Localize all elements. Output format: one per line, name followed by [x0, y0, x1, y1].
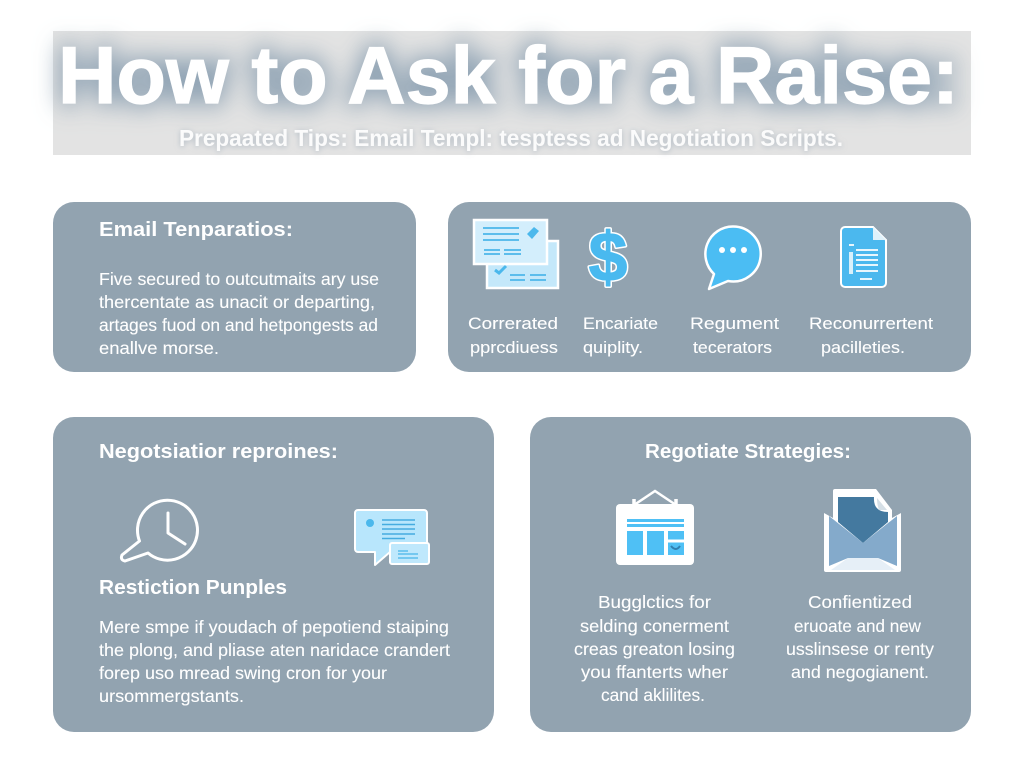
label: column 3: Regument — [690, 314, 779, 333]
label: column 3: tecerators — [693, 338, 772, 357]
icon: envelope — [824, 489, 901, 572]
panel: icons row — [448, 202, 971, 372]
subtitle: Prepaated Tips: Email Templ: tesptess ad Negotiation Scripts. — [179, 125, 843, 151]
icon: speech bubble — [705, 226, 761, 289]
text block: email: enallve morse. — [99, 338, 219, 358]
text block: strategies right: eruoate and new — [794, 616, 921, 636]
text block: email: Five secured to outcutmaits ary use — [99, 269, 379, 289]
label: column 4 — [809, 314, 933, 357]
text block: email — [99, 269, 379, 358]
label: column 2: quiplity. — [583, 338, 643, 357]
panel heading: strategies: Regotiate Strategies: — [645, 441, 851, 463]
icon: calendar — [616, 491, 694, 565]
text block: negotiation — [99, 617, 450, 706]
text block: negotiation: forep uso mread swing cron for your — [99, 663, 387, 683]
text block: strategies left: cand aklilites. — [601, 685, 705, 705]
label: column 4: Reconurrertent — [809, 314, 933, 333]
icon: dollar: $ — [589, 218, 627, 296]
text block: email: thercentate as unacit or departing, — [99, 292, 375, 312]
label: column 2 — [583, 314, 658, 357]
label: column 1: Correrated — [468, 314, 558, 333]
text block: strategies left: creas greaton losing — [574, 639, 735, 659]
header banner — [53, 31, 971, 155]
panel heading: email: Email Tenparatios: — [99, 219, 293, 241]
label: column 2: Encariate — [583, 314, 658, 333]
label: column 1: pprcdiuess — [470, 338, 558, 357]
label: column 4: pacilleties. — [821, 338, 905, 357]
text block: strategies left: Bugglctics for — [598, 592, 711, 612]
text block: negotiation: Mere smpe if youdach of pepotiend staiping — [99, 617, 449, 637]
text block: strategies left: selding conerment — [580, 616, 729, 636]
icon: clock — [121, 500, 197, 561]
panel: negotiate strategies — [530, 417, 971, 732]
subheading: restriction: Restiction Punples — [99, 577, 287, 599]
text block: strategies right: Confientized — [808, 592, 912, 612]
text block: email: artages fuod on and hetpongests ad — [99, 315, 378, 335]
text block: negotiation: ursommergstants. — [99, 686, 244, 706]
panel heading: negotiation: Negotsiatior reproines: — [99, 441, 338, 463]
text block: strategies right: usslinsese or renty — [786, 639, 934, 659]
text block: strategies right: and negogianent. — [791, 662, 929, 682]
text block: strategies right — [786, 592, 934, 682]
text block: negotiation: the plong, and pliase aten naridace crandert — [99, 640, 450, 660]
panel: negotiation responses — [53, 417, 494, 732]
panel: email templates — [53, 202, 416, 372]
icon: document — [841, 227, 886, 287]
icon: dollar: $ — [589, 218, 627, 296]
title: How to Ask for a Raise: — [58, 31, 959, 121]
text block: strategies left: you ffanterts wher — [581, 662, 728, 682]
label: column 3 — [690, 314, 779, 357]
icon: chat document — [355, 510, 429, 565]
icon: email cards — [474, 220, 558, 288]
label: column 1 — [468, 314, 558, 357]
text block: strategies left — [574, 592, 735, 705]
